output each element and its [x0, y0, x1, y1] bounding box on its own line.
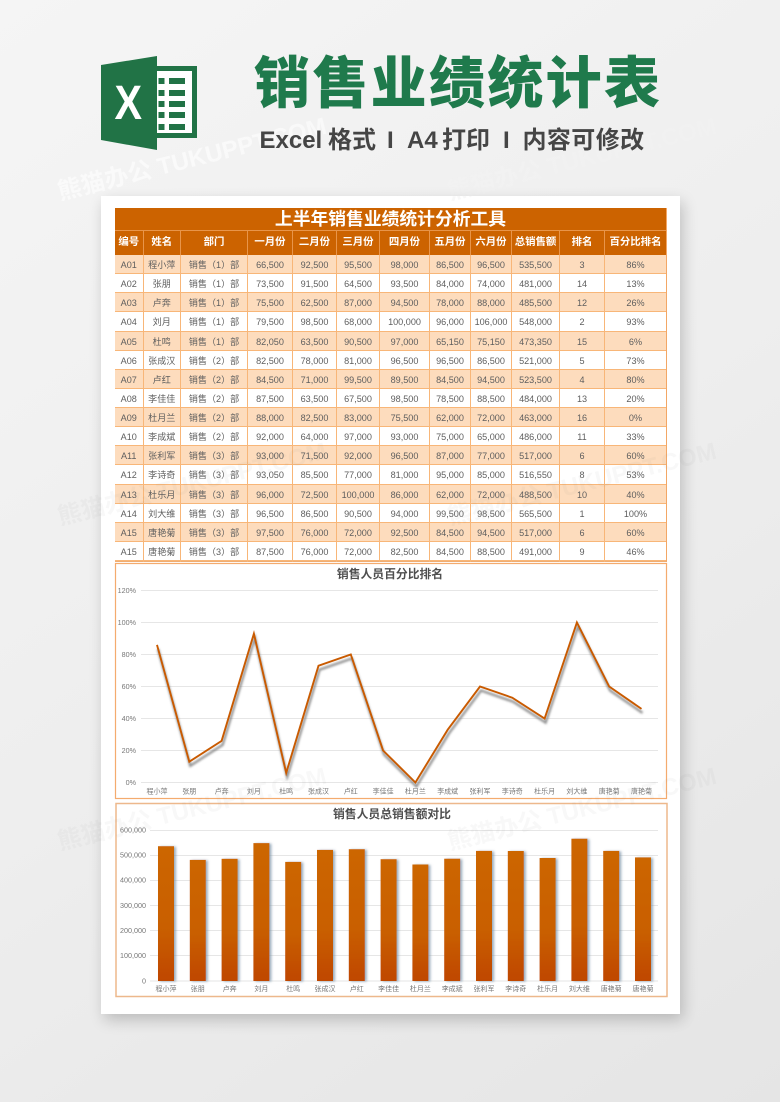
- row A15 second: 88,500: [477, 547, 505, 557]
- row A08: 销售（2）部: [189, 394, 239, 404]
- bar chart x axis labels: 刘大维: [569, 984, 590, 993]
- row A07: 80%: [626, 375, 645, 385]
- row A15: 97,500: [256, 528, 284, 538]
- row A02: 销售（1）部: [189, 279, 239, 289]
- row A15: 517,000: [519, 528, 552, 538]
- bar chart x axis labels: 张成汉: [314, 984, 336, 993]
- table header row: 百分比排名: [610, 237, 661, 248]
- line chart x axis labels: 杜乐月: [534, 786, 555, 796]
- row A12: [115, 465, 666, 484]
- line chart x axis labels: 杜鸣: [279, 786, 293, 796]
- table header row: 排名: [572, 237, 592, 248]
- row A05: 97,000: [391, 336, 418, 346]
- row A03: 88,000: [477, 298, 505, 308]
- row A01: 86%: [626, 260, 645, 270]
- row A07: 94,500: [477, 375, 505, 385]
- bar chart x axis labels: [156, 984, 654, 993]
- row A06: 521,000: [519, 356, 552, 366]
- row A14: 1: [579, 509, 585, 519]
- row A12: 53%: [626, 470, 645, 480]
- row A04: 106,000: [475, 317, 507, 327]
- background watermarks: 熊猫办公 TUKUPPT.COM: [445, 113, 719, 206]
- row A07: 99,500: [344, 375, 372, 385]
- row A14: 96,500: [256, 509, 284, 519]
- row A05: 75,150: [477, 336, 505, 346]
- row A02: 84,000: [436, 279, 464, 289]
- row A13: 72,500: [301, 490, 328, 500]
- row A15 second: 491,000: [519, 547, 552, 557]
- row A09: 销售（2）部: [189, 413, 239, 423]
- row A10: A10: [121, 432, 137, 442]
- bar chart y axis labels: 0: [142, 976, 146, 986]
- row A07: 销售（2）部: [189, 375, 239, 385]
- row A07: 89,500: [391, 375, 418, 385]
- row A04: 刘月: [153, 317, 171, 327]
- row A04: 93%: [626, 317, 645, 327]
- row A06: 81,000: [344, 356, 372, 366]
- row A15 second: 销售（3）部: [189, 547, 239, 557]
- row A08: A08: [121, 394, 137, 404]
- row A02: 13%: [626, 279, 645, 289]
- line chart x axis labels: 李诗奇: [502, 786, 523, 796]
- bar chart y axis labels: [120, 826, 146, 986]
- row A14: 565,500: [519, 509, 552, 519]
- row A12: 93,050: [256, 470, 284, 480]
- row A01: 92,500: [301, 260, 328, 270]
- table header row: 姓名: [151, 237, 172, 248]
- icon: excel logo: X: [114, 76, 142, 130]
- row A12: 85,500: [301, 470, 328, 480]
- row A02: 91,500: [301, 279, 328, 289]
- row A01: [115, 255, 666, 274]
- row A13: 40%: [626, 490, 645, 500]
- table header row: 五月份: [434, 237, 466, 248]
- row A07: A07: [121, 375, 137, 385]
- row A06: 73%: [626, 356, 645, 366]
- row A03: 94,500: [391, 298, 418, 308]
- row A12: 81,000: [391, 470, 418, 480]
- row A14: 94,000: [391, 509, 418, 519]
- row A11: 87,000: [436, 451, 464, 461]
- line chart y axis labels: 20%: [122, 746, 137, 755]
- row A08: 484,000: [519, 394, 552, 404]
- overlay watermarks: 熊猫办公 TUKUPPT.COM: [55, 438, 329, 531]
- row A05: 杜鸣: [153, 336, 171, 346]
- row A05: 15: [577, 336, 587, 346]
- line chart y axis labels: 100%: [118, 618, 137, 627]
- row A15: 94,500: [477, 528, 505, 538]
- row A01: 98,000: [391, 260, 418, 270]
- row A09: 62,000: [436, 413, 464, 423]
- row A06: 销售（2）部: [189, 356, 239, 366]
- row A14: 98,500: [477, 509, 505, 519]
- row A06: 96,500: [436, 356, 464, 366]
- line chart y axis labels: 40%: [122, 714, 137, 723]
- row A08: 63,500: [301, 394, 328, 404]
- bar series: [158, 839, 651, 981]
- bar chart x axis labels: 卢奔: [223, 984, 237, 993]
- table header row: 四月份: [389, 237, 420, 248]
- table header row: 部门: [204, 237, 224, 248]
- row A10: [115, 427, 666, 446]
- row A08: 78,500: [436, 394, 464, 404]
- bar chart y axis labels: 500,000: [120, 850, 146, 860]
- row A04: 销售（1）部: [189, 317, 239, 327]
- row A13: 72,000: [477, 490, 505, 500]
- row A04: 548,000: [519, 317, 552, 327]
- subtitle: 打印: [442, 127, 490, 154]
- row A03: [115, 293, 666, 312]
- row A09: [115, 408, 666, 427]
- row A15 second: 82,500: [391, 547, 418, 557]
- row A15: 92,500: [391, 528, 418, 538]
- row A01: 3: [579, 260, 585, 270]
- row A01: A01: [121, 260, 137, 270]
- row A03: 87,000: [344, 298, 372, 308]
- row A15: 6: [579, 528, 585, 538]
- bar chart x axis labels: 卢红: [350, 984, 364, 993]
- overlay watermarks: 熊猫办公 TUKUPPT.COM: [445, 113, 719, 206]
- row A08: 20%: [626, 394, 645, 404]
- row A14: [115, 504, 666, 523]
- subtitle: 格式: [328, 127, 376, 154]
- panel: white paper sheet: [101, 196, 680, 1014]
- table header row: 六月份: [475, 237, 507, 248]
- row A11: [115, 446, 666, 465]
- row A03: 卢奔: [153, 298, 171, 308]
- subtitle: I: [387, 127, 394, 154]
- row A11: 60%: [626, 451, 645, 461]
- table header row: 编号: [118, 237, 139, 248]
- row A02: 93,500: [391, 279, 418, 289]
- row A12: 77,000: [344, 470, 372, 480]
- row A04: 98,500: [301, 317, 328, 327]
- row A04: 96,000: [436, 317, 464, 327]
- row A09: 75,500: [391, 413, 418, 423]
- row A06: 96,500: [391, 356, 418, 366]
- row A12: 95,000: [436, 470, 464, 480]
- row A08: [115, 389, 666, 408]
- row A09: 82,500: [301, 413, 328, 423]
- row A10: 64,000: [301, 432, 328, 442]
- line chart x axis labels: 唐艳菊: [631, 786, 652, 796]
- row A10: 销售（2）部: [189, 432, 239, 442]
- bar chart x axis labels: 李诗奇: [505, 984, 526, 993]
- row A04: 68,000: [344, 317, 372, 327]
- row A02: 481,000: [519, 279, 552, 289]
- row A15 second: 46%: [626, 547, 645, 557]
- table header row: 三月份: [342, 237, 374, 248]
- bar chart y axis labels: 600,000: [120, 826, 146, 834]
- bar chart x axis labels: 唐艳菊: [632, 984, 654, 993]
- row A12: 8: [579, 470, 585, 480]
- row A04: 79,500: [256, 317, 284, 327]
- row A06: 78,000: [301, 356, 328, 366]
- row A08: 87,500: [256, 394, 284, 404]
- row A10: 11: [577, 432, 587, 442]
- bar chart x axis labels: 张朋: [191, 984, 205, 993]
- row A11: 张利军: [148, 451, 175, 461]
- row A03: 78,000: [436, 298, 464, 308]
- row A03: 26%: [626, 298, 645, 308]
- line chart y axis labels: 60%: [122, 682, 137, 691]
- row A13: A13: [121, 490, 137, 500]
- row A11: 96,500: [391, 451, 418, 461]
- bar chart y axis labels: 100,000: [120, 951, 146, 960]
- row A02: 73,500: [256, 279, 284, 289]
- row A15 second: [115, 542, 666, 561]
- row A03: 62,500: [301, 298, 328, 308]
- row A06: 82,500: [256, 356, 284, 366]
- row A11: 77,000: [477, 451, 505, 461]
- overlay watermarks: 熊猫办公 TUKUPPT.COM: [55, 763, 329, 856]
- line chart x axis labels: 张成汉: [308, 786, 329, 796]
- row A10: 93,000: [391, 432, 418, 442]
- line chart shadow: [158, 626, 642, 786]
- row A14: 刘大维: [148, 509, 175, 519]
- row A04: 100,000: [388, 317, 421, 327]
- row A14: 99,500: [436, 509, 464, 519]
- row A11: 93,000: [256, 451, 284, 461]
- row A13: [115, 484, 666, 504]
- row A13: 488,500: [519, 490, 552, 500]
- row A11: 销售（3）部: [189, 451, 239, 461]
- table header row: 一月份: [254, 237, 286, 248]
- bar chart x axis labels: 杜鸣: [286, 984, 300, 993]
- row A10: 486,000: [519, 432, 552, 442]
- row A14: 100%: [624, 509, 647, 519]
- row A13: 10: [577, 490, 587, 500]
- row A15: 84,500: [436, 528, 464, 538]
- subtitle: Excel: [260, 127, 322, 154]
- row A15: 72,000: [344, 528, 372, 538]
- row A12: 516,550: [519, 470, 552, 480]
- row A14: A14: [121, 509, 137, 519]
- table header row: [115, 231, 666, 255]
- overlay watermarks: 熊猫办公 TUKUPPT.COM: [445, 438, 719, 531]
- row A05: 90,500: [344, 336, 372, 346]
- row A09: A09: [121, 413, 137, 423]
- row A07: 卢红: [153, 375, 171, 385]
- bar chart x axis labels: 李佳佳: [378, 984, 399, 993]
- bar chart x axis labels: 刘月: [254, 984, 268, 993]
- line chart x axis labels: 张利军: [470, 786, 490, 796]
- line chart x axis labels: 程小萍: [146, 786, 168, 796]
- row A08: 88,500: [477, 394, 505, 404]
- row A03: 销售（1）部: [189, 298, 239, 308]
- row A12: 销售（3）部: [189, 470, 239, 480]
- panel: sales table: [115, 208, 667, 562]
- row A15 second: 84,500: [436, 547, 464, 557]
- row A01: 96,500: [477, 260, 505, 270]
- bar chart y axis labels: 300,000: [120, 901, 146, 910]
- row A11: 71,500: [301, 451, 328, 461]
- bar chart x axis labels: 唐艳菊: [601, 984, 622, 993]
- row A07: 71,000: [301, 375, 328, 385]
- row A15: A15: [121, 528, 137, 538]
- row A15 second: A15: [121, 547, 137, 557]
- bar chart x axis labels: 张利军: [474, 984, 494, 993]
- row A08: 67,500: [344, 394, 372, 404]
- row A05: A05: [121, 336, 137, 346]
- row A05: [115, 332, 666, 351]
- row A15 second: 唐艳菊: [148, 547, 175, 557]
- row A15: [115, 523, 666, 542]
- row A10: 97,000: [344, 432, 372, 442]
- row A02: 张朋: [153, 279, 171, 289]
- row A04: 2: [579, 317, 585, 327]
- row A13: 62,000: [436, 490, 464, 500]
- line chart x axis labels: 杜月兰: [405, 786, 426, 796]
- row A14: 90,500: [344, 509, 372, 519]
- subtitle: I: [503, 127, 510, 154]
- row A06: 86,500: [477, 356, 505, 366]
- row A09: 0%: [629, 413, 642, 423]
- row A08: 13: [577, 394, 587, 404]
- bar chart x axis labels: 李成斌: [442, 984, 463, 993]
- row A10: 75,000: [436, 432, 464, 442]
- row A08: 李佳佳: [148, 394, 175, 404]
- row A05: 销售（1）部: [189, 336, 239, 346]
- line chart x axis labels: 卢红: [344, 786, 358, 796]
- row A01: 66,500: [256, 260, 284, 270]
- row A08: 98,500: [391, 394, 418, 404]
- row A05: 82,050: [256, 336, 284, 346]
- subtitle: A4: [407, 127, 438, 154]
- row A02: [115, 274, 666, 293]
- row A06: 张成汉: [148, 356, 175, 366]
- row A14: 86,500: [301, 509, 328, 519]
- table header row: 总销售额: [515, 237, 556, 248]
- line chart x axis labels: 李成斌: [437, 786, 458, 796]
- bar chart x axis labels: 程小萍: [156, 984, 176, 993]
- row A01: 535,500: [519, 260, 552, 270]
- row A09: 72,000: [477, 413, 505, 423]
- row A07: 84,500: [256, 375, 284, 385]
- table header row: 二月份: [299, 237, 330, 248]
- row A05: 63,500: [301, 336, 328, 346]
- row A07: [115, 370, 666, 389]
- row A09: 463,000: [519, 413, 552, 423]
- row A01: 程小萍: [148, 260, 175, 270]
- row A05: 65,150: [436, 336, 464, 346]
- row A15: 60%: [626, 528, 645, 538]
- line chart x axis labels: 李佳佳: [373, 786, 394, 796]
- row A10: 65,000: [477, 432, 505, 442]
- line chart y axis labels: 120%: [118, 586, 137, 595]
- row A11: A11: [121, 451, 136, 461]
- row A15: 76,000: [301, 528, 328, 538]
- line chart x axis labels: 张朋: [182, 786, 196, 796]
- row A04: [115, 312, 666, 332]
- row A07: 523,500: [519, 375, 552, 385]
- row A09: 88,000: [256, 413, 284, 423]
- row A10: 李成斌: [148, 432, 175, 442]
- line chart x axis labels: 刘月: [247, 786, 261, 796]
- bar chart title: 销售人员总销售额对比: [333, 807, 451, 821]
- row A13: 100,000: [342, 490, 374, 500]
- bar chart gridlines: [150, 830, 658, 981]
- row A12: 85,000: [477, 470, 505, 480]
- subtitle: 内容可修改: [522, 127, 644, 154]
- row A10: 33%: [626, 432, 645, 442]
- row A07: 84,500: [436, 375, 464, 385]
- row A12: 李诗奇: [148, 470, 175, 480]
- row A13: 96,000: [256, 490, 284, 500]
- bar chart x axis labels: 杜乐月: [537, 984, 558, 993]
- row A06: 5: [579, 356, 585, 366]
- table title: 上半年销售业绩统计分析工具: [275, 209, 506, 229]
- row A03: 75,500: [256, 298, 284, 308]
- row A06: [115, 351, 666, 370]
- row A14: 销售（3）部: [189, 509, 239, 519]
- line chart y axis labels: [118, 586, 137, 787]
- line chart x axis labels: 刘大维: [566, 786, 587, 796]
- row A15: 唐艳菊: [148, 528, 175, 538]
- row A03: A03: [121, 298, 137, 308]
- row A04: A04: [121, 317, 137, 327]
- row A13: 杜乐月: [148, 490, 175, 500]
- row A01: 销售（1）部: [189, 260, 239, 270]
- row A03: 12: [577, 298, 587, 308]
- line chart x axis labels: [146, 786, 652, 796]
- line chart x axis labels: 卢奔: [215, 786, 229, 796]
- row A02: 64,500: [344, 279, 372, 289]
- bar chart y axis labels: 200,000: [120, 926, 146, 935]
- row A11: 6: [579, 451, 585, 461]
- line chart x axis labels: 唐艳菊: [599, 786, 620, 796]
- row A05: 473,350: [519, 336, 552, 346]
- row A11: 517,000: [519, 451, 552, 461]
- background watermarks: 熊猫办公 TUKUPPT.COM: [55, 113, 329, 206]
- row A03: 485,500: [519, 298, 552, 308]
- row A01: 95,500: [344, 260, 372, 270]
- row A02: A02: [121, 279, 137, 289]
- row A02: 14: [577, 279, 587, 289]
- row A15 second: 76,000: [301, 547, 328, 557]
- table title: [115, 208, 666, 231]
- row A13: 86,000: [391, 490, 418, 500]
- row A07: 4: [579, 375, 585, 385]
- bar chart y axis labels: 400,000: [120, 876, 146, 884]
- line chart series: [157, 622, 642, 782]
- row A15 second: 9: [579, 547, 585, 557]
- line chart title: 销售人员百分比排名: [337, 567, 443, 581]
- line chart y axis labels: 0%: [126, 778, 137, 787]
- overlay watermarks: 熊猫办公 TUKUPPT.COM: [445, 763, 719, 856]
- line chart gridlines: [141, 590, 658, 782]
- row A15 second: 72,000: [344, 547, 372, 557]
- row A02: 74,000: [477, 279, 505, 289]
- row A10: 92,000: [256, 432, 284, 442]
- row A15 second: 87,500: [256, 547, 284, 557]
- row A11: 92,000: [344, 451, 372, 461]
- row A12: A12: [121, 470, 137, 480]
- line chart y axis labels: 80%: [122, 650, 137, 659]
- row A09: 16: [577, 413, 587, 423]
- row A09: 83,000: [344, 413, 372, 423]
- row A13: 销售（3）部: [189, 490, 239, 500]
- bar chart x axis labels: 杜月兰: [410, 984, 431, 993]
- row A06: A06: [121, 356, 137, 366]
- row A01: 86,500: [436, 260, 464, 270]
- row A09: 杜月兰: [148, 413, 175, 423]
- title: 销售业绩统计表: [254, 52, 660, 115]
- row A15: 销售（3）部: [189, 528, 239, 538]
- row A05: 6%: [629, 336, 642, 346]
